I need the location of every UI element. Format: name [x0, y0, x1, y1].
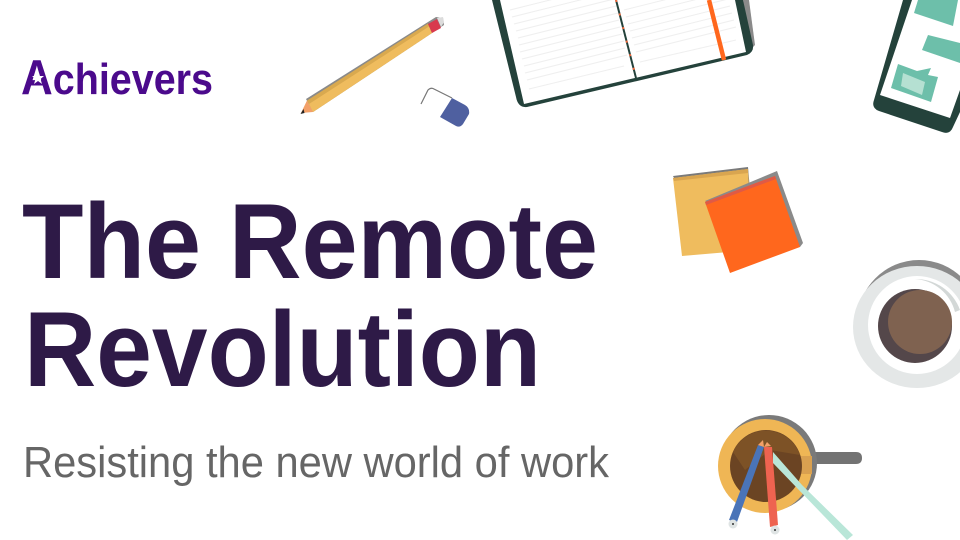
icon: notebook — [492, 0, 755, 107]
title: Revolution — [24, 289, 541, 409]
icon: mug with pencils — [718, 415, 862, 540]
icon: pencil — [300, 17, 444, 114]
mug handle — [805, 452, 862, 464]
logo: Achievers: Achievers — [21, 51, 213, 105]
notebook page lines — [510, 0, 736, 89]
title: The Remote — [22, 181, 598, 301]
subtitle: Resisting the new world of work — [23, 438, 610, 487]
mint pencil — [773, 452, 853, 540]
icon: eraser — [421, 88, 469, 127]
icon: phone — [873, 0, 960, 133]
red pencil — [764, 442, 780, 534]
title — [22, 181, 598, 409]
icon: coffee cup on saucer — [853, 260, 960, 388]
blue pencil — [728, 440, 764, 528]
icon: sticky notes — [673, 167, 803, 273]
